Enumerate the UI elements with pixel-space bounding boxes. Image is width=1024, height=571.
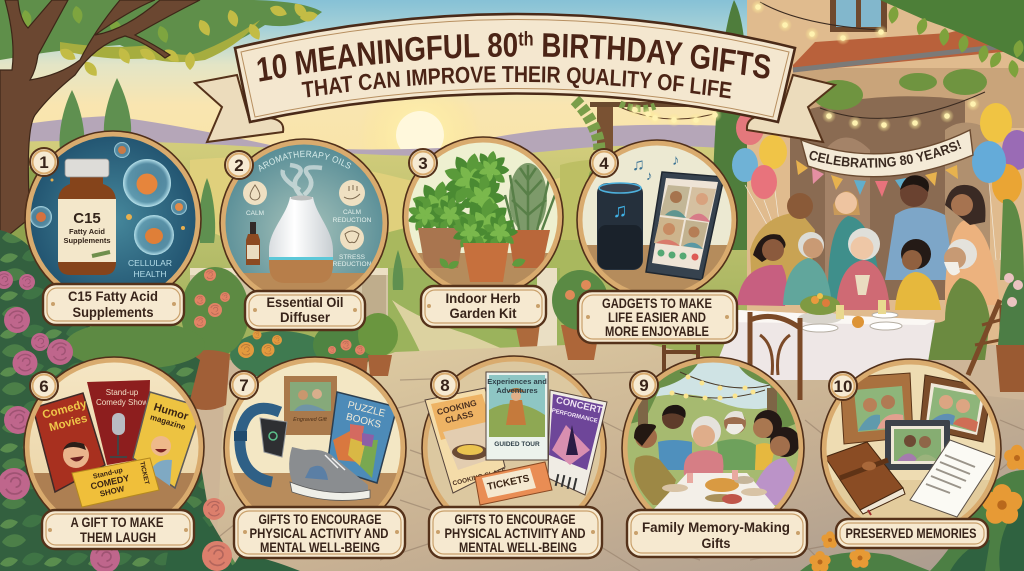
terracotta pots near terrace bbox=[336, 355, 392, 378]
plaque 4: MORE ENJOYABLE bbox=[605, 323, 709, 339]
comedy show ticket: Stand-up bbox=[92, 467, 124, 481]
cooking class poster: CLASS bbox=[444, 409, 475, 425]
humor magazine: Humor bbox=[152, 401, 190, 423]
plaque 2: Diffuser bbox=[280, 309, 331, 325]
title line 1: 10 MEANINGFUL 80 bbox=[257, 32, 517, 82]
plaque 6: THEM LAUGH bbox=[80, 529, 156, 545]
dropper bottle bbox=[246, 222, 260, 265]
comedy movies book bbox=[33, 393, 105, 492]
badge 1 bbox=[30, 148, 58, 176]
plaque 4 bbox=[578, 291, 737, 343]
banner: celebrating 80 years: CELEBRATING 80 YEARS! bbox=[810, 140, 962, 168]
cells bbox=[30, 142, 187, 255]
person: woman in teal dress bbox=[828, 191, 878, 300]
string lights bbox=[670, 372, 770, 400]
plaque 4: LIFE EASIER AND bbox=[608, 309, 706, 325]
right photo frame bbox=[920, 375, 992, 442]
background: string lights on villa bbox=[628, 0, 985, 132]
badge 2 bbox=[225, 151, 253, 179]
badge 9 bbox=[630, 371, 658, 399]
plaque 3: Indoor Herb bbox=[446, 290, 520, 306]
puzzle book bbox=[327, 392, 397, 483]
benefit captions: REDUCTION bbox=[333, 261, 372, 268]
person: older man in green sweater bbox=[910, 239, 990, 360]
background: sky bbox=[0, 0, 1024, 170]
title line 1 bbox=[257, 31, 770, 82]
terracotta pot right bbox=[996, 278, 1024, 392]
plaque 10 bbox=[836, 519, 988, 548]
plaque 2 bbox=[245, 291, 365, 330]
title banner bbox=[234, 12, 796, 124]
text: cellular health: CELLULAR bbox=[128, 258, 172, 268]
panel 6: a gift to make them laugh bbox=[23, 356, 205, 510]
supplement bottle bbox=[58, 159, 116, 275]
comedy movies book: Comedy bbox=[41, 398, 89, 422]
plaque 9: Gifts bbox=[702, 535, 731, 551]
engraved photo frame bbox=[284, 376, 337, 435]
badge 6: 6 bbox=[39, 377, 49, 396]
text: cellular health: HEALTH bbox=[134, 269, 166, 279]
table tone bbox=[822, 480, 1002, 540]
plaque 8: MENTAL WELL-BEING bbox=[459, 539, 577, 555]
garden backdrop bbox=[625, 360, 805, 510]
comedy movies book: Movies bbox=[48, 413, 89, 434]
plaque 1: C15 Fatty Acid bbox=[68, 288, 158, 304]
music notes: ♪ bbox=[672, 152, 680, 169]
badge 4: 4 bbox=[599, 154, 609, 173]
guided tour poster: Adventures bbox=[496, 386, 538, 395]
heading: aromatherapy oils: AROMATHERAPY OILS bbox=[258, 150, 352, 172]
person: woman in peach top bbox=[945, 185, 1000, 305]
background: paving lines bbox=[215, 372, 1024, 571]
background: pillar and pot behind plaque bbox=[515, 268, 557, 352]
panel 7: physical activity and mental well-being bbox=[223, 356, 407, 506]
plaque 8: GIFTS TO ENCOURAGE bbox=[454, 511, 576, 527]
panel 8: experiences bbox=[422, 356, 607, 540]
background: left tree with trunk and canopy bbox=[0, 0, 322, 242]
loose herb sprigs bbox=[440, 258, 526, 269]
plaque 1: Supplements bbox=[72, 304, 154, 320]
guided tour poster: Experiences and bbox=[487, 377, 547, 386]
badge 10 bbox=[829, 372, 857, 400]
background: rolling fields bbox=[0, 141, 770, 360]
background: distant hills bbox=[0, 116, 770, 200]
panel 2: essential oil diffuser bbox=[219, 138, 389, 291]
text: cellular health bbox=[128, 260, 172, 277]
badge 1: 1 bbox=[39, 153, 49, 172]
humor magazine: magazine bbox=[149, 413, 187, 432]
panel 1: C15 fatty acid supplements bbox=[24, 130, 202, 284]
plaque 6 bbox=[42, 510, 194, 549]
bottom right plants with orange flowers bbox=[800, 445, 1024, 571]
white diffuser bbox=[269, 196, 333, 283]
table bbox=[418, 253, 548, 285]
bottom-left leaves bbox=[165, 500, 300, 571]
plaque 9 bbox=[627, 510, 807, 557]
cooking class poster bbox=[425, 388, 508, 493]
table bbox=[34, 473, 194, 509]
concert poster: CONCERT bbox=[555, 395, 603, 416]
badge 7 bbox=[230, 371, 258, 399]
title ribbon: left tail bbox=[195, 75, 283, 142]
smart speaker bbox=[597, 183, 643, 270]
celebrating family group bbox=[737, 175, 1000, 360]
handwritten letter bbox=[910, 440, 996, 517]
supplement bottle: Fatty Acid bbox=[69, 227, 105, 236]
background: cypress trees bbox=[60, 78, 403, 290]
benefit captions: REDUCTION bbox=[333, 217, 372, 224]
table bbox=[587, 245, 727, 290]
plaque 8 bbox=[429, 507, 602, 558]
person: woman in pink sweater bbox=[737, 234, 787, 306]
background: garden path behind terrace bbox=[385, 268, 560, 356]
terracotta pot centre with flowers bbox=[552, 270, 608, 360]
comedy show ticket: TICKET bbox=[138, 461, 150, 485]
stand-up comedy book bbox=[87, 380, 150, 465]
comedy show ticket bbox=[72, 458, 159, 507]
stand-up comedy book: Stand-up bbox=[106, 388, 139, 397]
plaque 4: GADGETS TO MAKE bbox=[602, 295, 712, 311]
panel 9: family memory-making gifts bbox=[621, 356, 805, 509]
fitness band bbox=[234, 408, 287, 482]
tickets bbox=[475, 462, 552, 505]
tickets: TICKETS bbox=[486, 473, 531, 493]
plaque 2: Essential Oil bbox=[266, 294, 344, 310]
title ribbon: right tail bbox=[747, 75, 835, 142]
comedy show ticket: SHOW bbox=[99, 484, 126, 499]
puzzle book: PUZZLE bbox=[346, 400, 387, 420]
person: older woman in teal bbox=[783, 232, 832, 305]
music notes: ♫ bbox=[632, 155, 645, 174]
engraved photo frame: Engraved Gift bbox=[293, 417, 327, 423]
background: tall right cypress bbox=[712, 0, 750, 250]
background: paved patio floor bbox=[215, 342, 1024, 571]
plaque 6: A GIFT TO MAKE bbox=[70, 514, 164, 530]
badge 3: 3 bbox=[418, 154, 428, 173]
badge 3 bbox=[409, 149, 437, 177]
left photo frame bbox=[840, 373, 913, 444]
guided tour poster bbox=[486, 372, 548, 460]
tablet with video call bbox=[646, 172, 724, 280]
banner: celebrating 80 years bbox=[800, 129, 974, 178]
person: man in mustard shirt bbox=[750, 193, 815, 290]
plaque 7: PHYSICAL ACTIVITY AND bbox=[250, 525, 388, 541]
badge 6 bbox=[30, 372, 58, 400]
wooden chair foreground bbox=[750, 312, 800, 400]
benefit captions: STRESS bbox=[339, 254, 366, 261]
panel 3: indoor herb garden bbox=[403, 137, 565, 298]
top centre basil bbox=[444, 151, 510, 215]
climbing plant right with blossoms bbox=[1000, 199, 1024, 307]
title line 2: THAT CAN IMPROVE THEIR QUALITY OF LIFE bbox=[302, 66, 732, 98]
benefit captions bbox=[246, 209, 372, 268]
title line 1: th bbox=[518, 31, 533, 46]
plaque 7 bbox=[234, 507, 405, 558]
coral flowers bottom centre-left bbox=[202, 498, 232, 571]
chairs behind table bbox=[664, 345, 698, 372]
left basil bbox=[408, 181, 467, 231]
table bbox=[233, 473, 397, 506]
benefit captions: CALM bbox=[246, 210, 264, 217]
cooking class poster: COOKING bbox=[436, 397, 478, 417]
plaque 10: PRESERVED MEMORIES bbox=[846, 525, 976, 541]
background: pergola post with vines bbox=[575, 100, 720, 190]
terracotta planter centre-left bbox=[181, 350, 230, 410]
table spread bbox=[653, 470, 778, 510]
person: birthday woman in rose cardigan bbox=[836, 228, 890, 310]
background: climbing leaves top right bbox=[813, 0, 1024, 110]
brown leather journal bbox=[825, 442, 905, 515]
guided tour poster: GUIDED TOUR bbox=[494, 441, 540, 448]
supplement bottle: C15 bbox=[73, 210, 101, 227]
person: man in blue sweater bbox=[885, 175, 955, 280]
humor magazine bbox=[133, 392, 202, 488]
stand-up comedy book: Comedy Show bbox=[96, 398, 148, 407]
dining table with white cloth bbox=[710, 293, 935, 380]
background: setting sun bbox=[358, 73, 482, 197]
concert poster bbox=[548, 390, 607, 495]
plaque 7: GIFTS TO ENCOURAGE bbox=[258, 511, 382, 527]
concert poster: PERFORMANCE bbox=[551, 408, 598, 425]
comedy show ticket: COMEDY bbox=[90, 473, 130, 491]
puzzle book: BOOKS bbox=[345, 412, 382, 431]
plaque 3: Garden Kit bbox=[450, 305, 517, 321]
left garden foliage bbox=[0, 230, 240, 571]
background: villa building bbox=[747, 0, 1024, 345]
background: stone terrace wall bbox=[190, 268, 388, 355]
badge 8 bbox=[431, 371, 459, 399]
smart speaker: ♫ bbox=[612, 200, 628, 222]
pink roses bbox=[0, 271, 120, 571]
music notes bbox=[634, 156, 678, 180]
badge 9: 9 bbox=[639, 376, 649, 395]
running shoe bbox=[289, 447, 370, 500]
title line 1: BIRTHDAY GIFTS bbox=[543, 33, 770, 78]
music notes: ♪ bbox=[646, 168, 652, 183]
wooden chair right bbox=[968, 300, 1002, 375]
benefit icons bbox=[243, 180, 365, 250]
left pot bbox=[418, 228, 464, 268]
plaque 3 bbox=[421, 286, 546, 327]
wood shelf bbox=[244, 273, 364, 290]
cooking class poster: COOKING CLASS bbox=[452, 467, 508, 487]
centre photo frame bbox=[885, 420, 950, 470]
background: left balloons bbox=[732, 111, 787, 230]
badge 7: 7 bbox=[239, 376, 249, 395]
panel 10: preserved memories bbox=[821, 359, 1002, 540]
supplement bottle: Supplements bbox=[63, 236, 111, 245]
badge 4 bbox=[590, 149, 618, 177]
right pot bbox=[508, 230, 550, 268]
benefit captions: CALM bbox=[343, 209, 361, 216]
rosemary plant bbox=[505, 163, 555, 235]
steam bbox=[283, 165, 322, 197]
badge 2: 2 bbox=[234, 156, 244, 175]
panel 4: gadgets bbox=[575, 140, 740, 300]
background: right balloons bbox=[972, 103, 1024, 260]
badge 10: 10 bbox=[834, 377, 852, 396]
flowers: terrace blooms bbox=[194, 269, 365, 358]
bunting flags bbox=[796, 160, 958, 197]
front basil bbox=[453, 198, 518, 248]
badge 8: 8 bbox=[440, 376, 450, 395]
diners bbox=[634, 405, 800, 505]
plaque 1 bbox=[43, 284, 184, 325]
plaque 8: PHYSICAL ACTIVIITY AND bbox=[444, 525, 586, 541]
background: garden bushes bbox=[181, 267, 398, 379]
plaque 7: MENTAL WELL-BEING bbox=[260, 539, 380, 555]
centre pot bbox=[463, 243, 509, 282]
person: young woman in yellow bbox=[895, 239, 941, 310]
plaque 9: Family Memory-Making bbox=[642, 519, 790, 535]
left bush bbox=[65, 321, 205, 369]
